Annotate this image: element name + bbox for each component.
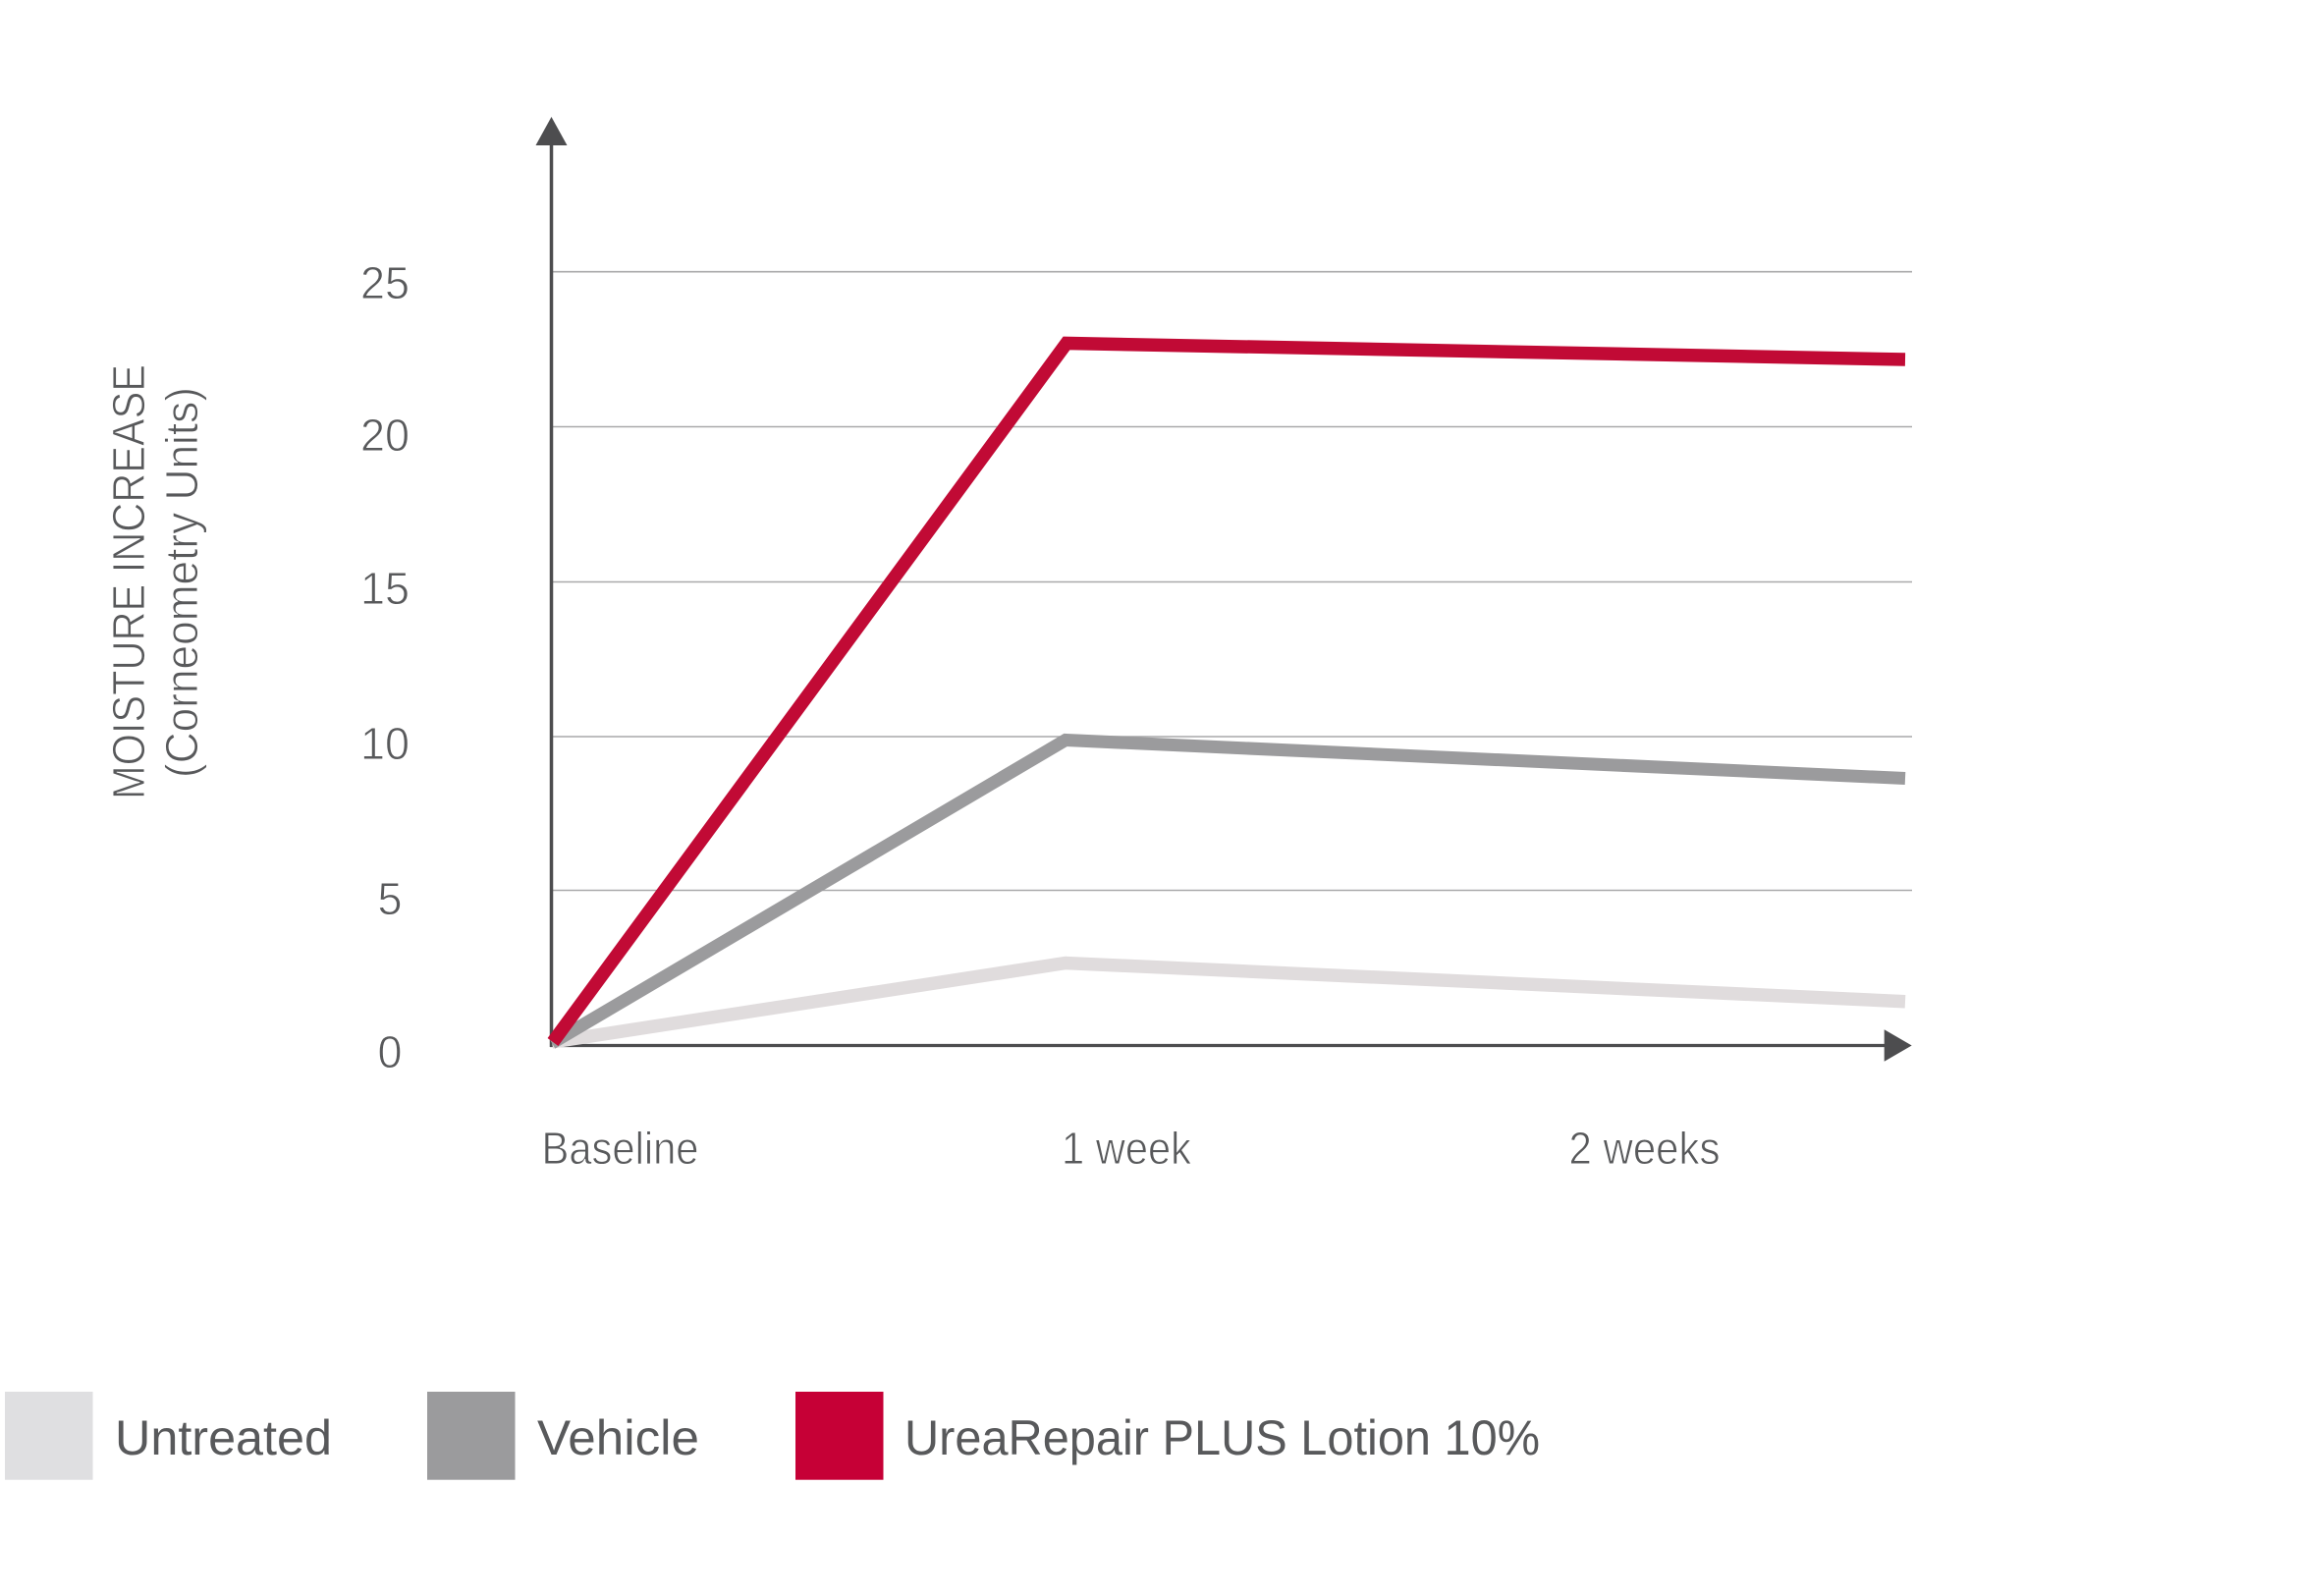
- x-axis labels: 2 weeks: [1569, 1123, 1721, 1174]
- y-axis tick labels: 20: [360, 410, 410, 461]
- x-axis labels: [542, 1123, 1721, 1174]
- x-axis labels: 1 week: [1062, 1123, 1192, 1174]
- horizontal grid lines: [552, 272, 1912, 890]
- line: Untreated: [552, 963, 1905, 1042]
- legend item: UreaRepair PLUS Lotion 10%: UreaRepair PLUS Lotion 10%: [904, 1410, 1540, 1465]
- legend item: UreaRepair PLUS Lotion 10%: [795, 1392, 1540, 1480]
- y axis with arrow: [536, 117, 568, 1047]
- line: Vehicle: [552, 741, 1905, 1043]
- y-axis title: (Corneometry Units): [156, 387, 207, 778]
- legend item: Untreated: [5, 1392, 332, 1480]
- y-axis tick labels: [360, 257, 410, 1077]
- legend item: Vehicle: [427, 1392, 699, 1480]
- y-axis tick labels: 10: [360, 718, 410, 769]
- y-axis tick labels: 5: [377, 873, 403, 924]
- y-axis tick labels: 15: [360, 563, 410, 614]
- line: UreaRepair PLUS Lotion 10%: [553, 344, 1905, 1042]
- x axis with arrow: [550, 1029, 1912, 1062]
- legend: [5, 1392, 1540, 1480]
- y-axis title: MOISTURE INCREASE: [103, 364, 154, 799]
- y-axis tick labels: 0: [377, 1026, 403, 1077]
- legend item: Vehicle: Vehicle: [537, 1410, 699, 1465]
- y-axis tick labels: 25: [360, 257, 410, 308]
- x-axis labels: Baseline: [542, 1123, 699, 1174]
- legend item: Untreated: Untreated: [115, 1410, 332, 1465]
- y-axis title: [103, 364, 207, 799]
